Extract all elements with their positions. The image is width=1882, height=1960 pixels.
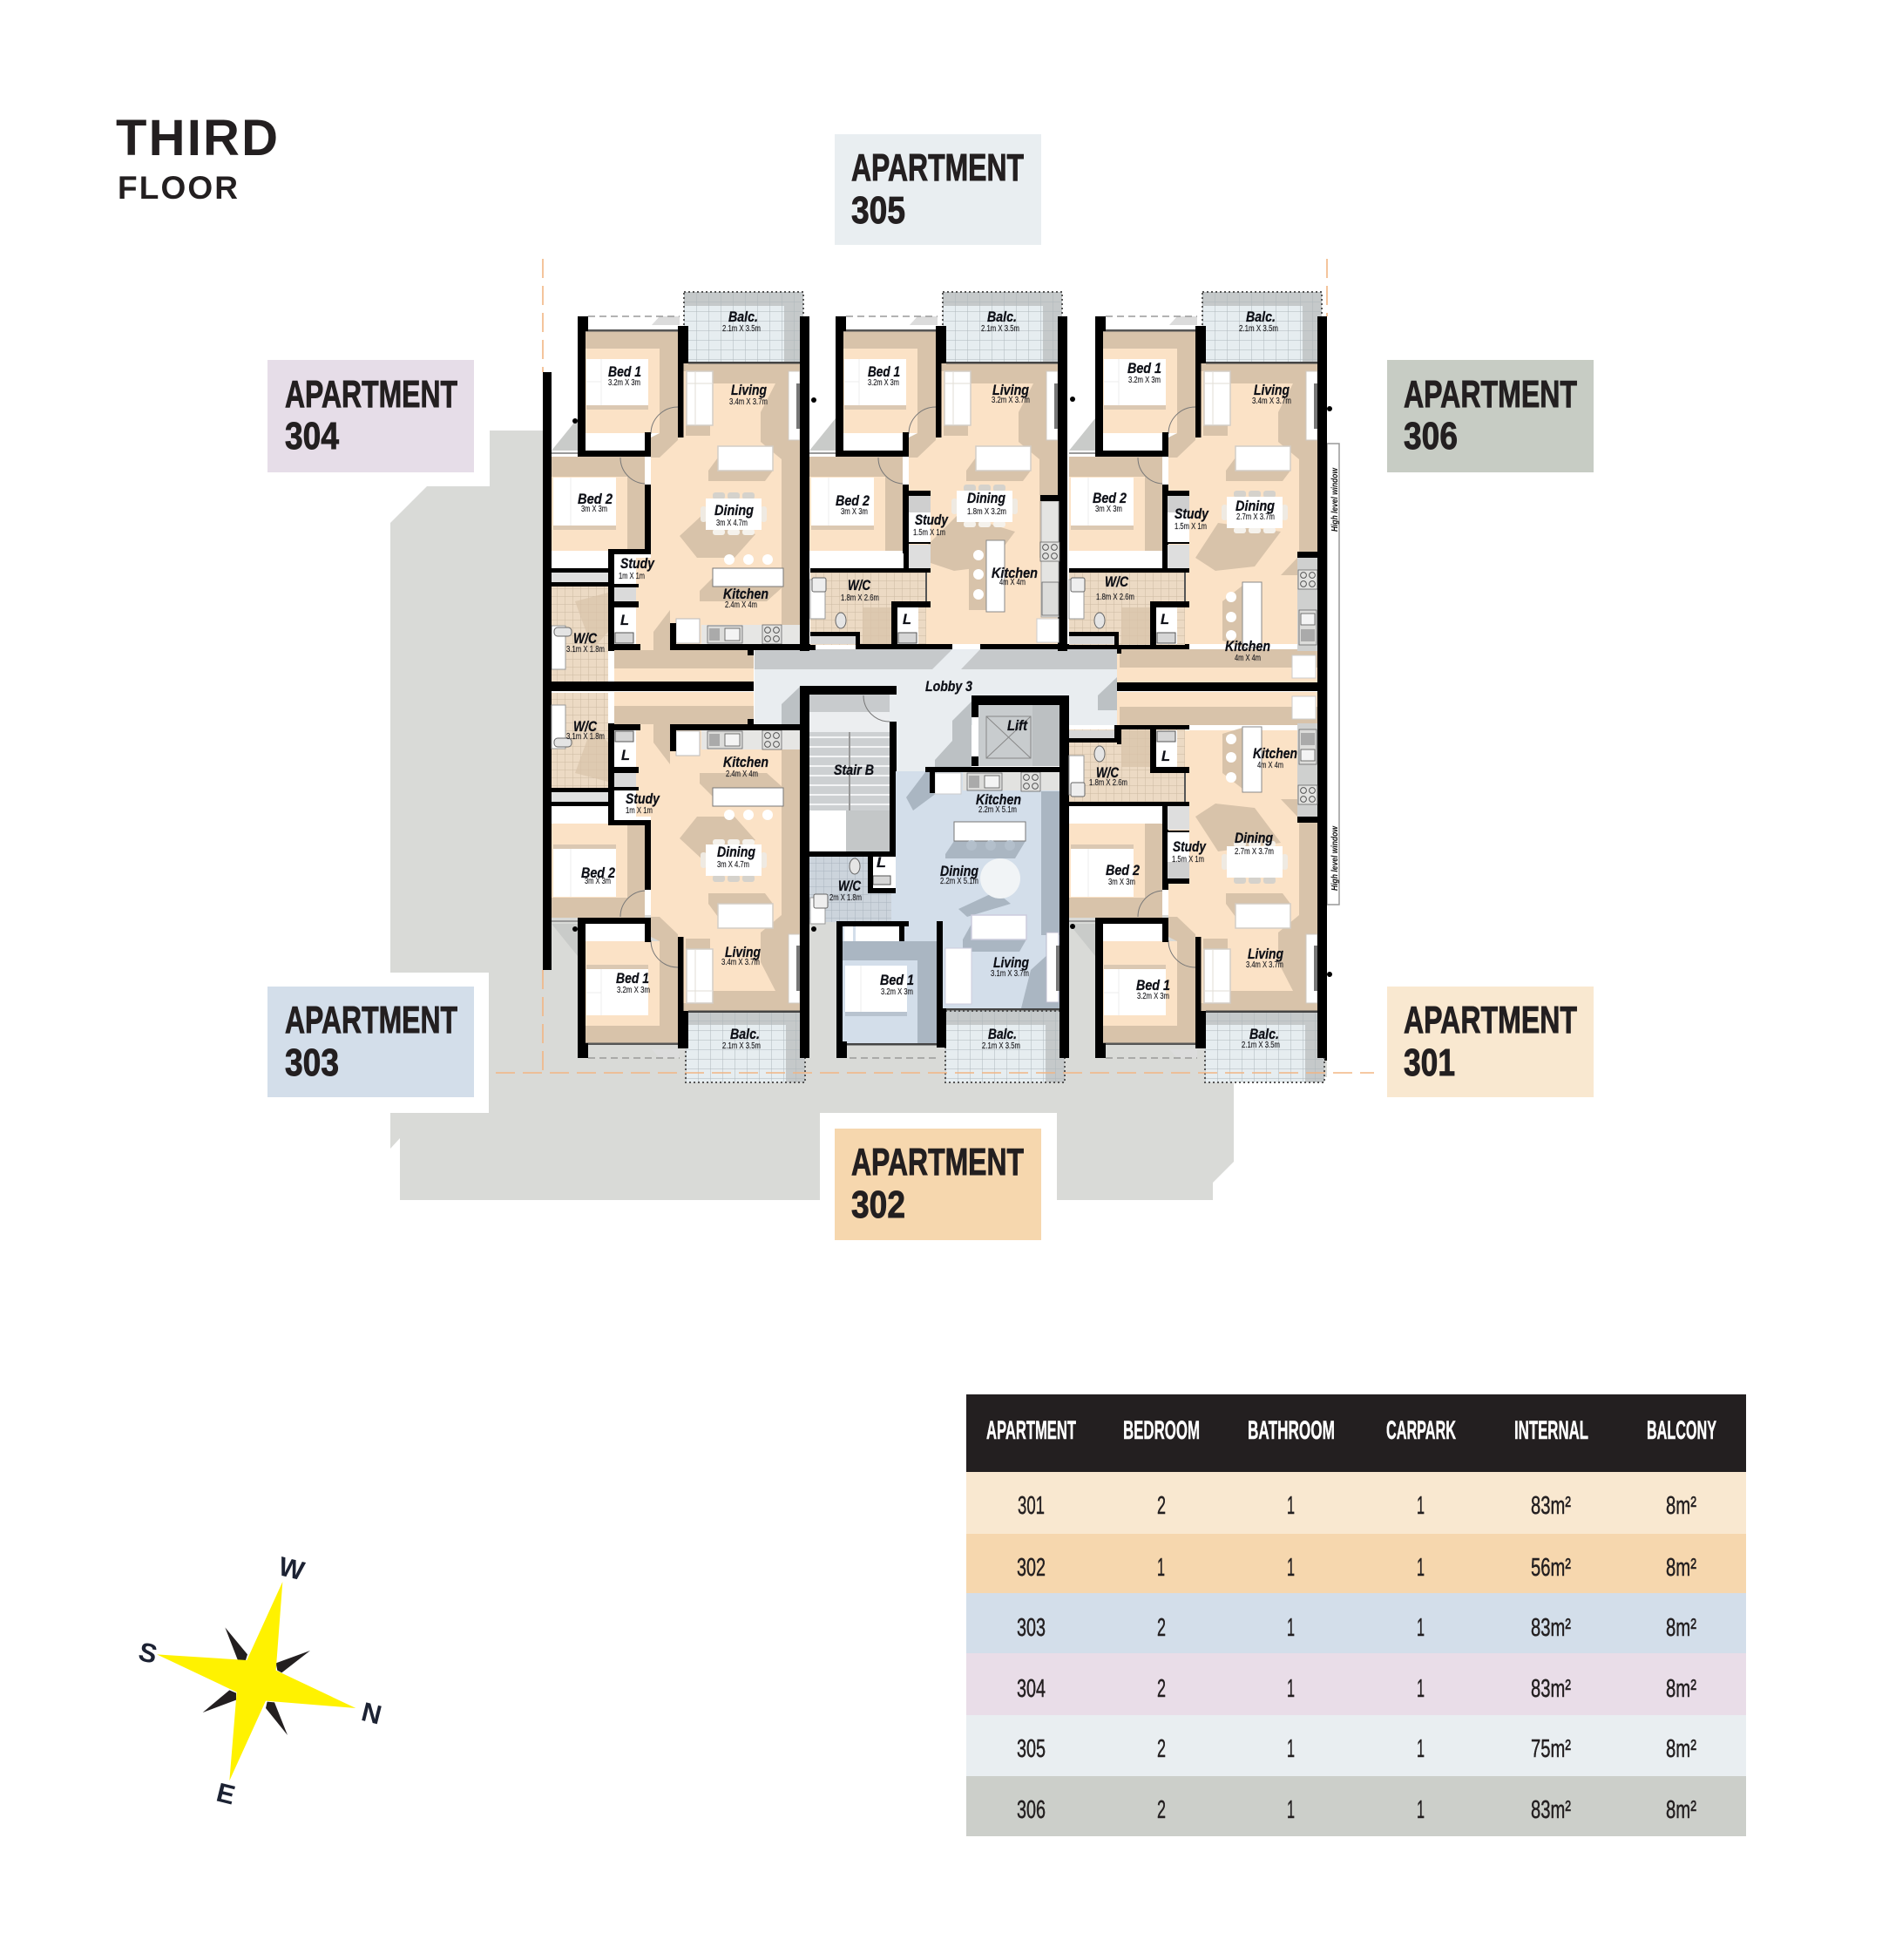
label: apartment 304 [267,360,474,472]
apartment 304 plan: 3.1m X 1.8m [566,645,605,654]
row 305: 1 [1287,1735,1295,1763]
lift [971,695,1069,766]
table header: INTERNAL [1514,1416,1588,1445]
label: apartment 301: APARTMENT [1404,999,1577,1041]
compass letters [136,1551,384,1811]
table header: APARTMENT [986,1416,1076,1445]
table header [966,1394,1746,1472]
apartment 302 plan: 3.2m X 3m [881,987,913,997]
apartment 304 plan: 1m X 1m [619,572,645,581]
table header: BEDROOM [1123,1416,1200,1445]
apartment 306 plan: Living [1254,383,1290,398]
row 304: 1 [1287,1675,1295,1703]
apartment 301 plan: Kitchen [1253,746,1297,762]
apartment 301 plan: Dining [1235,831,1273,846]
boundary dashed lines [496,259,1374,1073]
label: apartment 305: APARTMENT [851,146,1024,189]
apartment 305 plan: Balc. [987,309,1017,325]
row 306: 2 [1157,1796,1166,1824]
high level window [1327,444,1340,905]
apartment 306 plan: 1.8m X 2.6m [1096,593,1134,602]
row 305: 2 [1157,1735,1166,1763]
apartment 302 plan: L [877,855,886,871]
row 306: 83m² [1531,1796,1571,1824]
apartment 305 plan: 4m X 4m [999,578,1026,587]
row 301: 1 [1417,1492,1425,1520]
apartment 305 plan: Bed 2 [836,493,870,509]
apartment 304 plan: Bed 2 [578,492,613,507]
apartment 306 plan: 1.5m X 1m [1175,522,1207,532]
apartment 302 plan: 2.2m X 5.1m [978,805,1017,815]
apartment 306 plan [1069,292,1332,1061]
apartment 305 plan: Living [992,383,1029,398]
apartment 306 plan: 3.2m X 3m [1128,376,1161,385]
apartment 305 plan: 3m X 3m [841,507,868,517]
high level window: High level window [1330,467,1340,532]
apartment 301 plan: Bed 2 [1106,863,1140,878]
apartment 303 plan: 3m X 3m [585,877,611,886]
stair label: Stair B [834,763,874,778]
apartment 305 plan: 1.8m X 2.6m [841,593,879,603]
apartment 305 plan: Bed 1 [868,364,900,380]
apartment 303 plan: 3.4m X 3.7m [721,958,760,967]
row 301: 301 [1018,1492,1045,1520]
apartment 303 plan: 2.1m X 3.5m [722,1041,761,1051]
apartment 301 plan: 1.5m X 1m [1172,855,1204,865]
apartment 301 plan: 2.1m X 3.5m [1242,1041,1280,1050]
compass letters: S [136,1637,160,1670]
apartment 304 plan: 3.4m X 3.7m [729,397,768,407]
apartment 303 plan: L [621,748,630,763]
apartment 305 plan: W/C [848,578,871,593]
row 306 [966,1776,1746,1836]
apartment 305 plan: 1.8m X 3.2m [967,507,1006,517]
row 303: 8m² [1666,1614,1696,1642]
apartment 304 plan: 3m X 4.7m [716,519,748,528]
row 304: 83m² [1531,1675,1571,1703]
compass minor points [203,1627,310,1735]
apartment 302 plan: Dining [940,864,978,879]
apartment 301 plan: Study [1173,839,1207,855]
apartment 302 plan: W/C [838,878,862,894]
label: apartment 303 [267,987,474,1097]
row 305: 1 [1417,1735,1425,1763]
apartment 304 plan: L [620,613,629,628]
apartment 305 plan: Kitchen [992,566,1038,581]
apartment 306 plan: 2.7m X 3.7m [1236,512,1275,522]
row 302: 1 [1157,1554,1165,1582]
apartment 305 plan: 2.1m X 3.5m [981,324,1019,334]
label: apartment 304: APARTMENT [285,373,457,416]
row 304: 8m² [1666,1675,1696,1703]
label: apartment 305: 305 [851,189,905,232]
apartment 305 plan: L [903,612,911,627]
apartment 305 plan: 3.2m X 3.7m [992,396,1030,405]
label: apartment 302: 302 [851,1183,905,1226]
apartment 306 plan: 2.1m X 3.5m [1239,324,1278,334]
apartment 304 plan: 3.2m X 3m [608,378,640,388]
row 306: 1 [1287,1796,1295,1824]
row 301: 8m² [1666,1492,1696,1520]
apartment 303 plan: 3.2m X 3m [617,986,650,995]
apartment 306 plan: Bed 1 [1127,361,1161,376]
apartment 306 plan: Kitchen [1225,639,1270,654]
apartment 305 plan: 1.5m X 1m [913,528,945,538]
apartment 303 plan: 1m X 1m [626,806,653,816]
apartment 303 plan: Dining [717,844,755,860]
apartment 305 plan [809,292,1189,651]
apartment 301 plan: 3m X 3m [1108,878,1135,887]
row 304: 304 [1017,1675,1046,1703]
apartment 303 plan: 3.1m X 1.8m [566,732,605,742]
apartment 306 plan: 3m X 3m [1095,505,1122,514]
apartment 301 plan: 4m X 4m [1257,761,1283,770]
row 302: 302 [1017,1554,1046,1582]
label: apartment 303: 303 [285,1041,339,1084]
apartment 304 plan: Bed 1 [608,364,641,380]
row 302: 1 [1287,1554,1295,1582]
lift label: Lift [1007,718,1028,734]
title: FLOOR [118,170,238,206]
apartment 303 plan [552,692,816,1082]
row 301: 2 [1157,1492,1166,1520]
row 304: 1 [1417,1675,1425,1703]
apartment 304 plan: 3m X 3m [581,505,607,514]
apartment 306 plan: L [1161,612,1169,627]
apartment 303 plan: 3m X 4.7m [717,860,749,870]
label: apartment 303: APARTMENT [285,999,457,1041]
apartment 303 plan: 2.4m X 4m [726,770,758,779]
apartment 302 plan: 3.1m X 3.7m [991,969,1029,979]
row 306: 306 [1017,1796,1046,1824]
apartment 306 plan: Balc. [1246,309,1276,325]
apartment 304 plan: 2.1m X 3.5m [722,324,761,334]
row 303: 2 [1157,1614,1166,1642]
table header: BATHROOM [1248,1416,1335,1445]
compass star [157,1582,355,1780]
apartment 301 plan: 3.4m X 3.7m [1246,960,1283,970]
apartment 305 plan: Dining [967,491,1005,506]
row 301: 1 [1287,1492,1295,1520]
row 304 [966,1653,1746,1715]
apartment 302 plan [800,686,1069,1082]
apartment 303 plan: Study [626,791,660,807]
apartment 303 plan: Living [725,945,761,960]
label: apartment 306 [1387,360,1594,472]
row 305: 8m² [1666,1735,1696,1763]
apartment 303 plan: W/C [573,719,598,735]
apartment 301 plan [1069,692,1332,1082]
apartment schedule table [966,1394,1746,1836]
row 301 [966,1472,1746,1534]
row 303: 303 [1017,1614,1046,1642]
apartment 301 plan: Balc. [1249,1027,1279,1042]
apartment 304 plan: Kitchen [723,587,768,602]
apartment 304 plan: W/C [573,631,598,647]
table header: CARPARK [1386,1416,1456,1445]
label: apartment 302 [835,1129,1041,1240]
label: apartment 301: 301 [1404,1041,1455,1084]
row 303: 1 [1287,1614,1295,1642]
apartment 304 plan: Living [731,383,767,398]
apartment 301 plan: W/C [1096,765,1120,781]
row 305 [966,1715,1746,1776]
row 303 [966,1593,1746,1653]
compass [136,1551,384,1811]
site ground shadow [390,431,1327,1200]
label: apartment 305 [835,134,1041,245]
apartment 302 plan: 2.1m X 3.5m [982,1041,1020,1051]
apartment 306 plan: Dining [1235,498,1275,514]
label: apartment 301 [1387,987,1594,1097]
row 302: 8m² [1666,1554,1696,1582]
apartment 302 plan: Kitchen [976,792,1021,808]
apartment 306 plan: Bed 2 [1093,491,1127,506]
apartment 303 plan: Bed 1 [616,971,649,987]
table header: BALCONY [1647,1416,1716,1445]
stair B [800,686,897,857]
apartment 304 plan [543,292,816,970]
apartment 301 plan: Bed 1 [1136,978,1170,994]
row 302: 1 [1417,1554,1425,1582]
apartment 303 plan: Balc. [730,1027,760,1042]
row 304: 2 [1157,1675,1166,1703]
high level window: High level window [1330,825,1340,891]
row 301: 83m² [1531,1492,1571,1520]
row 302: 56m² [1531,1554,1571,1582]
title [116,110,278,206]
compass letters: E [213,1778,238,1811]
title: THIRD [116,110,278,166]
apartment 304 plan: Balc. [728,309,758,325]
apartment 306 plan: 3.4m X 3.7m [1252,397,1291,406]
row 302 [966,1534,1746,1593]
apartment 301 plan: Living [1248,946,1283,962]
label: apartment 304: 304 [285,415,339,458]
label: apartment 306: APARTMENT [1404,373,1577,416]
apartment 302 plan: Balc. [988,1027,1017,1042]
row 303: 1 [1417,1614,1425,1642]
apartment 301 plan: 2.7m X 3.7m [1235,847,1274,857]
label: apartment 306: 306 [1404,415,1458,458]
apartment 302 plan: 2m X 1.8m [829,893,862,903]
lobby [755,649,1117,773]
apartment 303 plan: Bed 2 [581,865,615,881]
row 306: 8m² [1666,1796,1696,1824]
apartment 305 plan: 3.2m X 3m [868,378,899,388]
apartment 301 plan: L [1161,749,1170,764]
apartment 303 plan: Kitchen [723,755,768,770]
row 305: 305 [1017,1735,1046,1763]
apartment 306 plan: W/C [1105,574,1129,590]
row 305: 75m² [1531,1735,1571,1763]
central corridor walls [543,649,1327,691]
apartment 306 plan: Study [1175,506,1209,522]
apartment 302 plan: Bed 1 [880,973,914,988]
apartment 301 plan: 1.8m X 2.6m [1089,778,1127,788]
label: apartment 302: APARTMENT [851,1141,1024,1183]
apartment 302 plan: 2.2m X 5.1m [940,877,978,886]
apartment 304 plan: 2.4m X 4m [725,600,757,610]
compass letters: W [275,1551,308,1586]
compass letters: N [359,1697,384,1730]
apartment 305 plan: Study [915,512,949,528]
apartment 306 plan: 4m X 4m [1235,654,1261,663]
apartment 301 plan: 3.2m X 3m [1137,992,1169,1001]
apartment 302 plan: Living [993,955,1029,971]
lobby label: Lobby 3 [925,679,972,695]
apartment 304 plan: Study [620,556,655,572]
row 306: 1 [1417,1796,1425,1824]
apartment 304 plan: Dining [714,503,754,519]
row 303: 83m² [1531,1614,1571,1642]
